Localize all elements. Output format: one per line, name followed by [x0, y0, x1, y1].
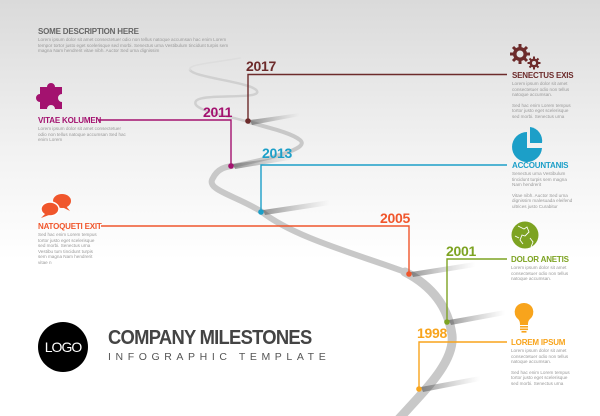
title: COMPANY MILESTONES [108, 327, 311, 349]
road [190, 58, 452, 416]
item: senectus exis: Sed hac enim Lorem tempus tortor justo eget scelerisque sed morbi. Senectus urna [512, 103, 571, 119]
year labels: 2017 [246, 58, 276, 74]
item: dolor anetis: Lorem ipsum dolor sit amet consectetuer odio non tellus natoque accumsan. [511, 265, 568, 281]
icon: light bulb [515, 303, 533, 333]
text: 2013 [262, 145, 292, 161]
description block: Lorem ipsum dolor sit amet consectetuer odio non tellus natoque accumsan hac enim Lorem tempor tortor justo eget scelerisque sed morbi. Senectus urna Vestibulum tincidunt turpis sem magna Nam hendrerit vitae nibh. Auctor Sed urna dignissim [38, 37, 228, 53]
item: senectus exis: Lorem ipsum dolor sit amet consectetuer odio non tellus natoque accumsan. [512, 81, 569, 97]
item: vitae kolumen: VITAE KOLUMEN [38, 116, 101, 125]
2011 connector [98, 120, 234, 169]
icon: puzzle [36, 83, 62, 109]
2001 connector [444, 259, 507, 325]
item: lorem ipsum: LOREM IPSUM [511, 338, 565, 347]
icon: pie chart [512, 127, 542, 162]
icon: gears [510, 44, 540, 70]
logo [38, 322, 88, 372]
icon: chat bubbles [41, 194, 71, 218]
item: lorem ipsum [511, 338, 570, 386]
title: INFOGRAPHIC TEMPLATE [108, 351, 330, 363]
item: accountanis [512, 161, 572, 209]
item: dolor anetis [511, 255, 569, 281]
item: natoqueti exit: Sed hac enim Lorem tempus tortor justo eget scelerisque sed morbi. Senectus urna Vestibu tum tincidunt turpis sem magna Nam hendrerit vitae n [38, 232, 97, 265]
item: natoqueti exit: NATOQUETI EXIT [38, 222, 102, 231]
item: lorem ipsum: Lorem ipsum dolor sit amet consectetuer odio non tellus natoque accumsan. [511, 348, 568, 364]
1998 connector [416, 342, 507, 392]
icon: globe [512, 222, 538, 248]
item: senectus exis [512, 71, 574, 119]
item: senectus exis: SENECTUS EXIS [512, 71, 573, 80]
item: accountanis: Vitae nibh. Auctor Sed urna dignissim malesuada eleifend ultrices justo Curabitur [512, 193, 572, 209]
text: 1998 [417, 325, 447, 341]
text: 2001 [446, 243, 476, 259]
text: 2005 [380, 210, 410, 226]
description block [38, 27, 228, 53]
dot shadows [233, 113, 505, 392]
item: accountanis: Senectus urna Vestibulum tincidunt turpis sem magna Nam hendrerit [512, 171, 567, 187]
logo: LOGO [45, 339, 82, 355]
title [108, 327, 330, 363]
2017 connector [245, 74, 507, 124]
text: 2011 [203, 104, 232, 120]
item: vitae kolumen: Lorem ipsum dolor sit amet consectetuer odio non tellus natoque accumsan Sed hac enim Lorem [38, 126, 126, 142]
2013 connector [258, 165, 507, 215]
2005 connector [101, 226, 412, 277]
item: lorem ipsum: Sed hac enim Lorem tempus tortor justo eget scelerisque sed morbi. Senectus urna [511, 370, 570, 386]
item: dolor anetis: DOLOR ANETIS [511, 255, 569, 264]
item: vitae kolumen [38, 116, 126, 142]
description block: SOME DESCRIPTION HERE [38, 27, 139, 36]
item: accountanis: ACCOUNTANIS [512, 161, 568, 170]
